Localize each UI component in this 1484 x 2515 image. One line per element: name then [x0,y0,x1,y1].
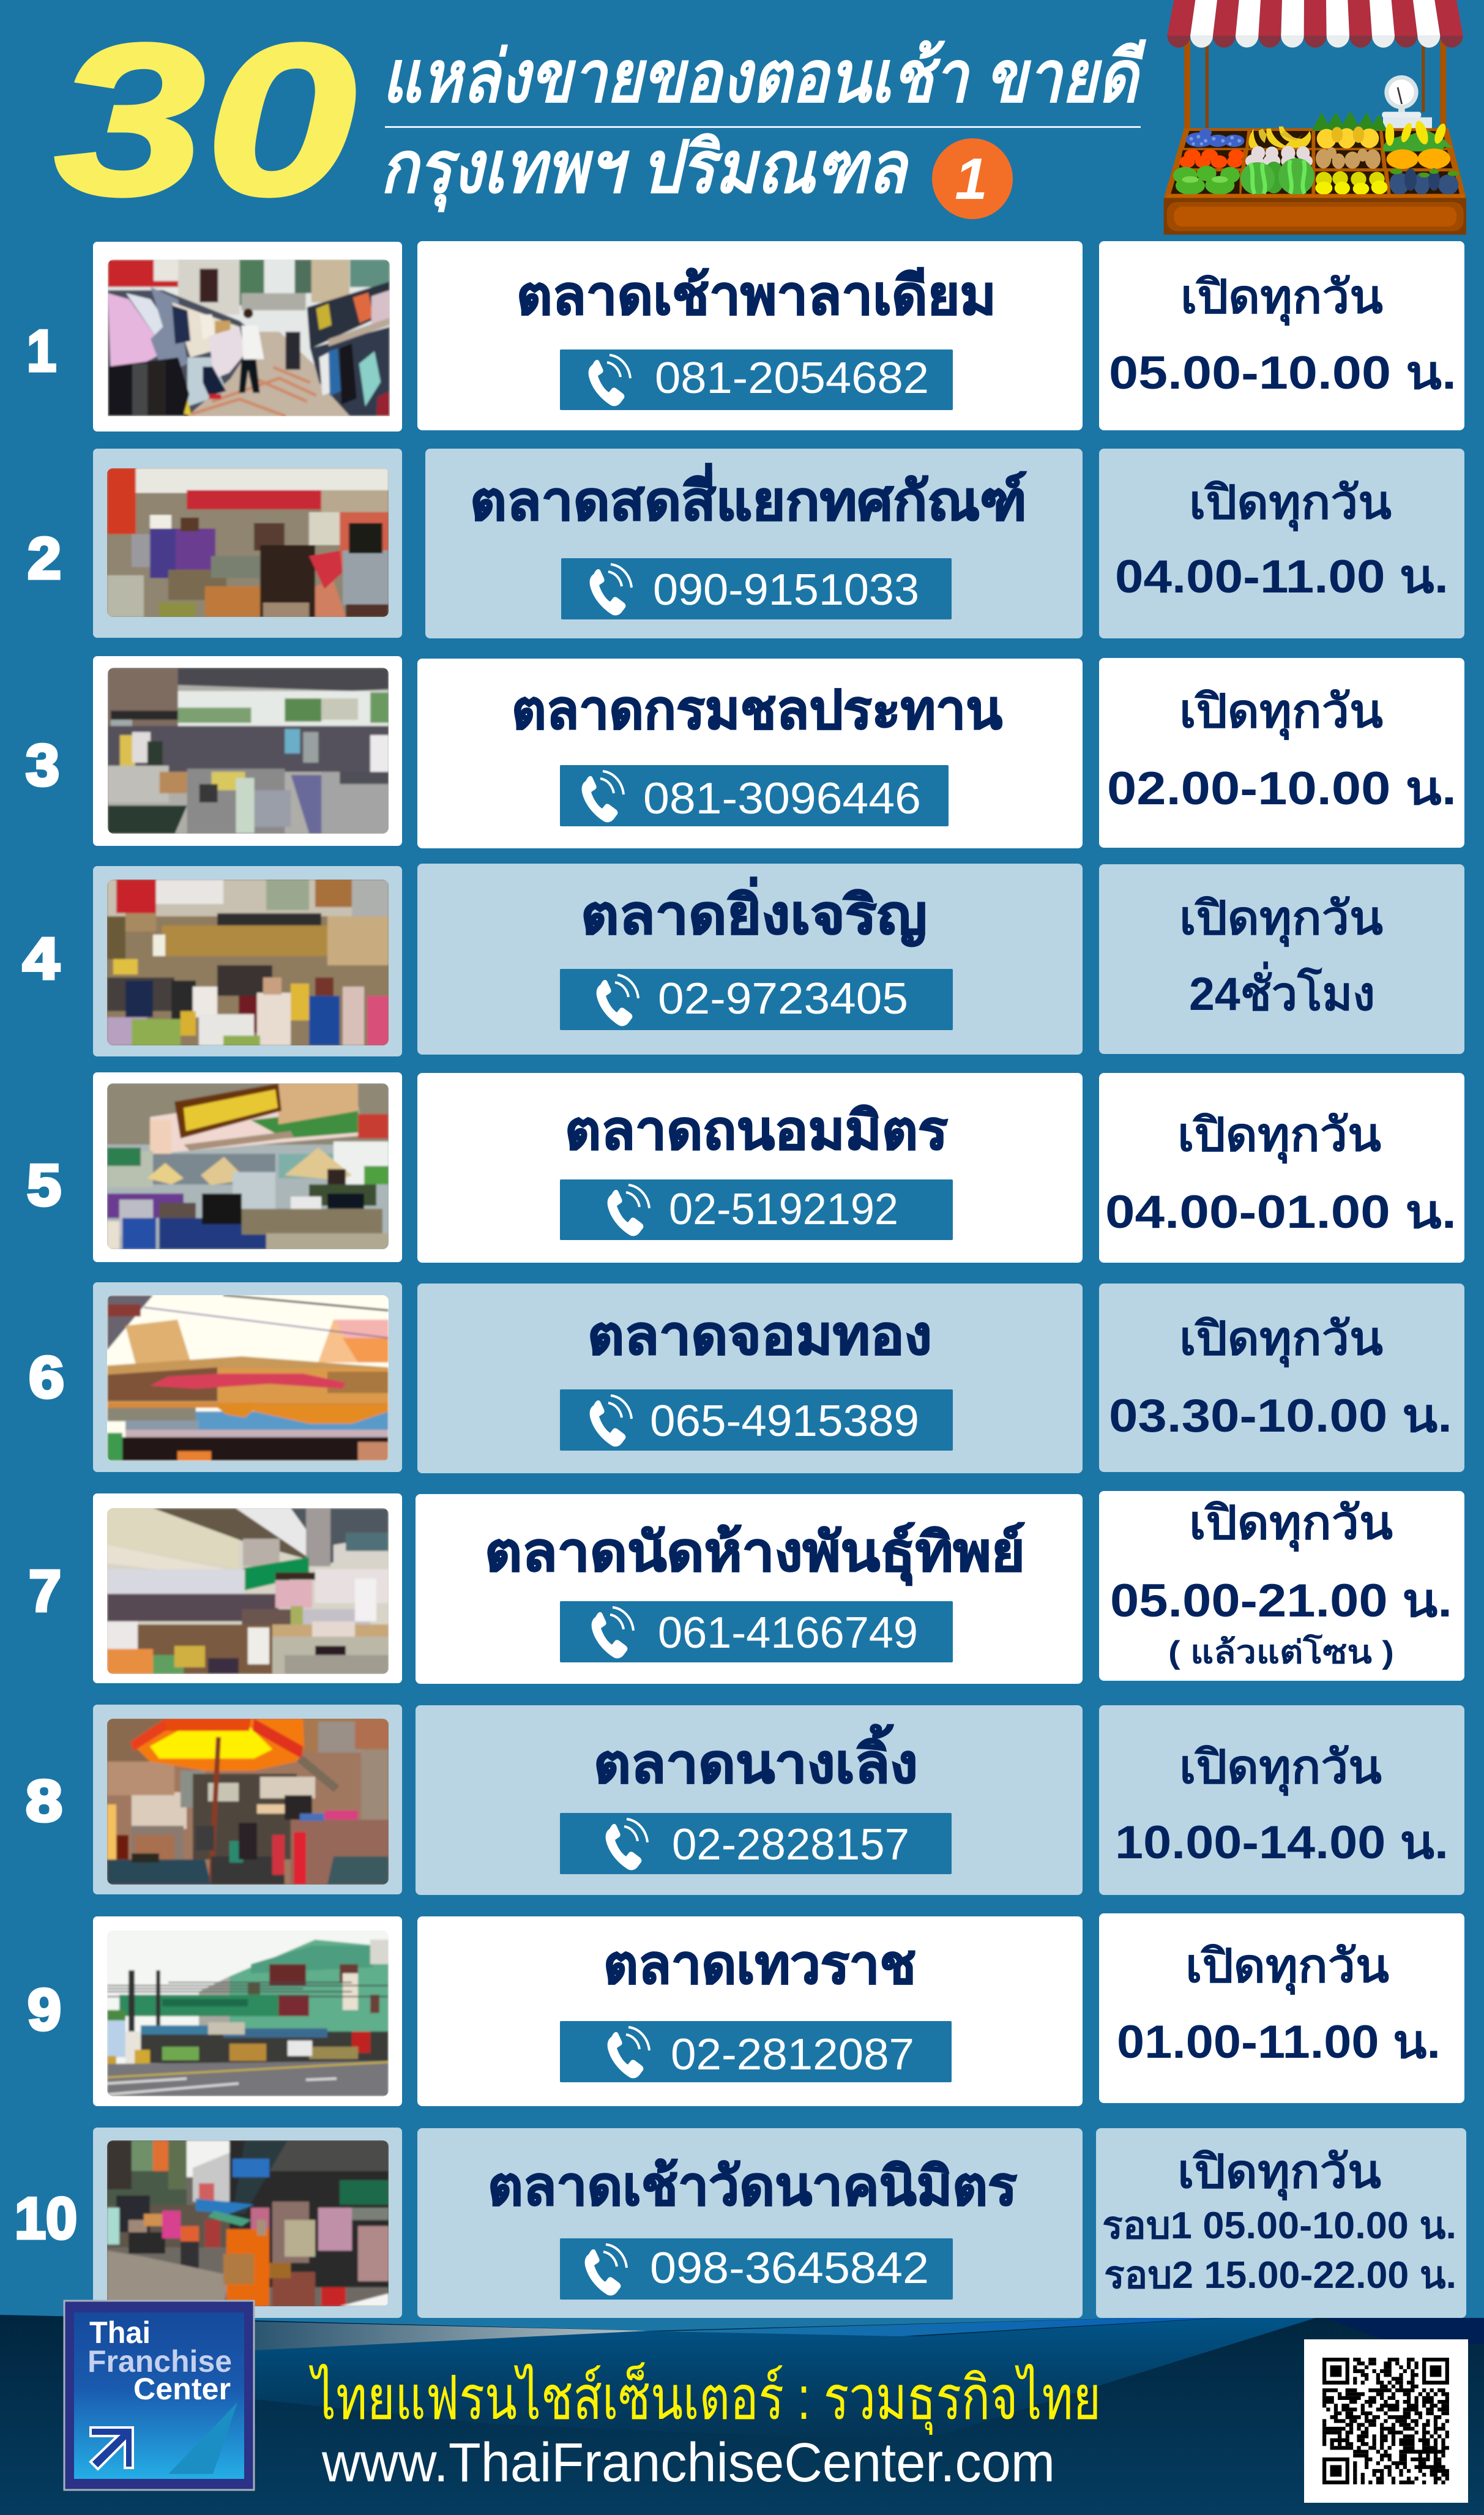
eggplants [1390,173,1458,195]
name card [416,1705,1083,1895]
logo: Thai Franchise Center [64,2301,254,2490]
row number: 2 [28,526,61,591]
time card: เปิดทุกวัน [1179,892,1383,947]
phone: 098-3645842 [650,2244,929,2293]
time card: รอบ1 05.00-10.00 น. [1102,2205,1456,2247]
phone [560,349,953,410]
time card [1099,1913,1464,2103]
tomatoes [1179,149,1244,168]
time card: 24ชั่วโมง [1189,961,1375,1020]
garlic [1245,146,1313,168]
footer band [0,2315,1484,2515]
name card [417,864,1083,1055]
time card: 04.00-11.00 น. [1115,551,1449,603]
pumpkins [1387,149,1450,169]
part number badge [932,138,1013,219]
name card: ตลาดเช้าวัดนาคนิมิตร [488,2156,1017,2216]
name card [425,449,1083,638]
time card [1099,241,1464,430]
row number: 8 [26,1768,62,1834]
row number: 3 [26,733,59,798]
phone [560,1389,953,1451]
time card [1099,658,1464,848]
photo card [93,2128,402,2319]
row 7 [29,1491,1464,1686]
time card [1099,1284,1464,1472]
time card [1099,1073,1464,1263]
phone [560,765,949,826]
name card [416,1494,1083,1684]
row number: 10 [15,2186,77,2251]
row number: 6 [29,1345,64,1410]
logo: Thai Franchise Center: Center [133,2372,231,2406]
phone [560,1601,953,1662]
name card [417,1916,1083,2106]
time card: รอบ2 15.00-22.00 น. [1104,2254,1456,2296]
phone: 065-4915389 [650,1397,919,1446]
time card: 03.30-10.00 น. [1109,1390,1452,1442]
photo card [93,1071,402,1262]
time card [1096,2128,1466,2318]
time card: 01.00-11.00 น. [1117,2016,1441,2068]
time card [1099,1705,1464,1895]
name card: ตลาดกรมชลประทาน [512,679,1002,740]
number 30: 30 [54,0,356,240]
row 1 [27,241,1464,438]
footer tagline: ไทยแฟรนไชส์เซ็นเตอร์ : รวมธุรกิจไทย [309,2361,1101,2435]
crate [1164,128,1466,198]
row 5 [27,1071,1464,1263]
name card: ตลาดเช้าพาลาเดียม [516,265,996,326]
phone: 081-3096446 [643,774,921,823]
time card: 04.00-01.00 น. [1105,1186,1456,1238]
phone [560,1179,953,1240]
name card: ตลาดนัดห้างพันธุ์ทิพย์ [485,1522,1025,1586]
row number: 4 [23,926,59,992]
phone: 061-4166749 [658,1609,918,1657]
name card [417,1284,1083,1473]
name card: ตลาดถนอมมิตร [565,1100,948,1160]
phone: 090-9151033 [653,566,919,615]
footer website: www.ThaiFranchiseCenter.com [321,2432,1055,2494]
phone [560,969,953,1030]
phone: 02-9723405 [658,974,908,1023]
row number: 7 [29,1558,61,1624]
pineapples [1311,111,1387,130]
phone [560,2238,953,2300]
lemons [1316,171,1385,187]
phone [560,1813,952,1874]
lettuce [1173,166,1240,195]
row number: 5 [27,1153,61,1218]
photo card [93,449,402,638]
phone [560,2021,952,2082]
row 4 [23,864,1464,1058]
time card: 10.00-14.00 น. [1115,1817,1449,1869]
time card: เปิดทุกวัน [1179,1741,1382,1796]
photo card [93,242,402,438]
row number: 9 [28,1977,61,2042]
corn [1383,130,1452,151]
potatoes [1316,148,1381,169]
time card: 02.00-10.00 น. [1107,763,1456,815]
time card: เปิดทุกวัน [1177,1109,1381,1164]
row number: 1 [27,318,56,384]
row 2 [28,449,1464,638]
icon: market stall [1164,0,1466,234]
icon: logo arrow [91,2427,133,2469]
bananas [1249,127,1311,148]
name card [417,241,1083,430]
phone [561,558,952,619]
time card: เปิดทุกวัน [1177,2146,1381,2201]
phone: 02-2828157 [672,1820,909,1869]
time card: ( แล้วแต่โซน ) [1168,1633,1394,1670]
row 8 [26,1705,1464,1897]
photo card [93,866,402,1058]
name card: ตลาดสดสี่แยกทศกัณฑ์ [470,463,1027,531]
name card: ตลาดยิ่งเจริญ [581,877,927,947]
photo card [93,1282,402,1473]
time card [1099,449,1464,638]
time card: เปิดทุกวัน [1179,686,1383,741]
photo card [93,656,402,846]
logo: Thai Franchise Center: Franchise [88,2344,232,2379]
QR code [1304,2339,1468,2503]
grapes [1185,129,1244,147]
photo card [93,1705,402,1897]
photo card [93,1916,402,2109]
watermelons [1263,162,1285,193]
awning [1167,0,1463,48]
row 3 [26,656,1464,848]
phone: 081-2054682 [655,354,929,403]
phone: 02-5192192 [669,1185,898,1234]
time card [1099,1491,1464,1681]
name card: ตลาดเทวราช [603,1934,916,1995]
time card: เปิดทุกวัน [1179,1313,1383,1368]
phone: 02-2812087 [671,2030,914,2079]
time card [1099,864,1464,1054]
scale [1382,75,1432,129]
title line 2: กรุงเทพฯ ปริมณฑล [380,127,909,212]
time card: 05.00-21.00 น. [1110,1575,1452,1627]
time card: เปิดทุกวัน [1189,477,1392,532]
counter front [1167,194,1464,198]
row 10 [15,2128,1466,2319]
name card [417,659,1083,848]
name card [417,1073,1083,1263]
photo card [93,1493,402,1686]
logo: Thai Franchise Center: Thai [89,2315,151,2350]
row 9 [28,1913,1464,2109]
name card: ตลาดนางเลิ้ง [594,1724,918,1794]
header title [54,0,1146,240]
name card [417,2128,1083,2318]
time card: เปิดทุกวัน [1189,1497,1393,1552]
time card: เปิดทุกวัน [1180,271,1383,326]
title line 1: แหล่งขายของตอนเช้า ขายดี [382,37,1146,118]
name card: ตลาดจอมทอง [587,1305,932,1366]
time card: เปิดทุกวัน [1185,1940,1389,1995]
part number badge: 1 [955,146,988,212]
row 6 [29,1282,1464,1473]
time card: 05.00-10.00 น. [1109,347,1456,399]
